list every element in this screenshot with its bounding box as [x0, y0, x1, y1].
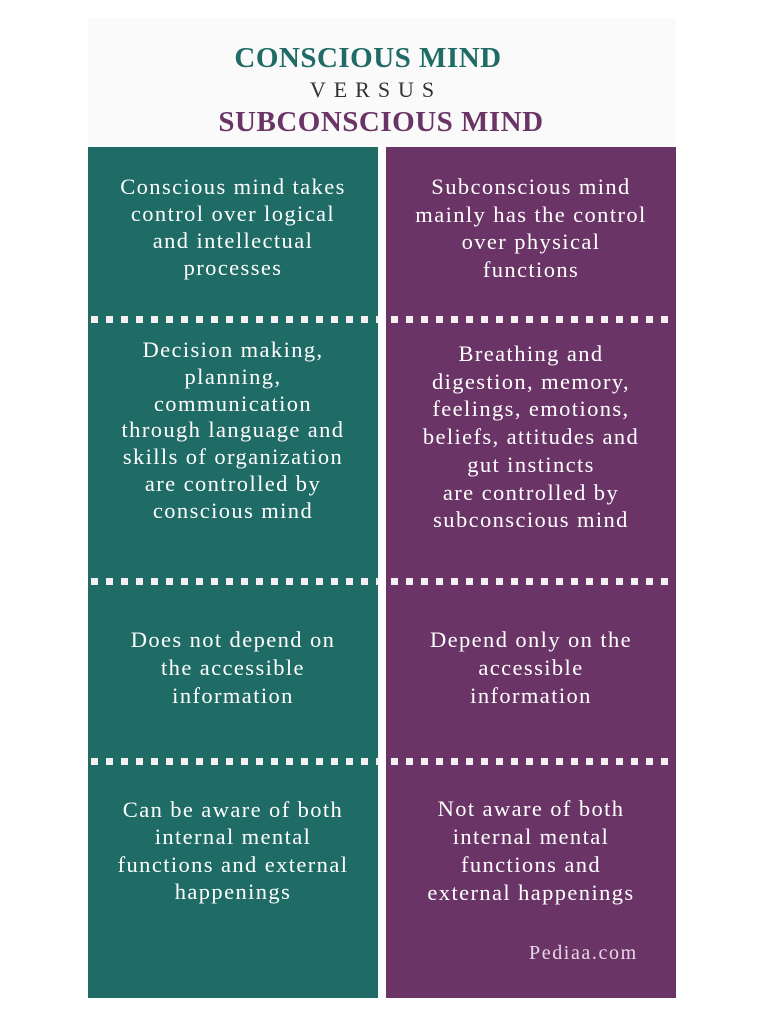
logo: pediaa: Pediaa.com — [529, 942, 638, 964]
text: functions: Decision making, — [142, 337, 324, 362]
text: information: Depend only on the — [430, 627, 632, 652]
text: control: Subconscious mind — [431, 174, 631, 199]
text: control: mainly has the control — [415, 202, 647, 227]
text: functions: skills of organization — [123, 444, 343, 469]
text: control: Conscious mind takes — [120, 174, 346, 199]
text: awareness: internal mental — [155, 824, 311, 849]
text: awareness: functions and — [461, 852, 601, 877]
title: subconscious mind: SUBCONSCIOUS MIND — [218, 106, 544, 138]
text: functions: are controlled by — [145, 471, 321, 496]
text: awareness: internal mental — [453, 824, 609, 849]
text: awareness: external happenings — [427, 880, 635, 905]
text: awareness: functions and external — [118, 852, 348, 877]
text: functions: Breathing and — [458, 341, 604, 366]
text: awareness: Not aware of both — [438, 796, 624, 821]
text: functions: subconscious mind — [433, 507, 629, 532]
text: control: control over logical — [131, 201, 335, 226]
text: awareness: happenings — [175, 879, 291, 904]
text: functions: planning, — [185, 364, 281, 389]
text: control: and intellectual — [153, 228, 313, 253]
text: information: information — [470, 683, 592, 708]
text: functions: beliefs, attitudes and — [423, 424, 639, 449]
text: information: Does not depend on — [131, 627, 335, 652]
text: information — [430, 627, 632, 708]
text: control: functions — [483, 257, 579, 282]
text: functions: feelings, emotions, — [432, 396, 630, 421]
text: functions — [422, 341, 639, 532]
text: functions — [122, 337, 344, 523]
text: information: information — [172, 683, 294, 708]
title: conscious mind: CONSCIOUS MIND — [234, 42, 502, 74]
text: information — [131, 627, 335, 708]
text: control: processes — [184, 255, 282, 280]
header panel — [88, 18, 676, 147]
text: control: over physical — [462, 229, 600, 254]
text: functions: communication — [154, 391, 312, 416]
text: functions: through language and — [122, 417, 344, 442]
text: awareness — [118, 797, 348, 904]
panel: conscious column — [88, 147, 378, 998]
text: awareness: Can be aware of both — [123, 797, 343, 822]
versus: VERSUS — [310, 77, 442, 102]
text: information: accessible — [478, 655, 584, 680]
text: awareness — [427, 796, 635, 905]
text: information: the accessible — [161, 655, 305, 680]
text: control — [415, 174, 647, 282]
panel: subconscious column — [386, 147, 676, 998]
text: functions: digestion, memory, — [432, 369, 630, 394]
text: functions: gut instincts — [467, 452, 595, 477]
text: control — [120, 174, 346, 280]
text: functions: are controlled by — [443, 480, 619, 505]
text: functions: conscious mind — [153, 498, 313, 523]
